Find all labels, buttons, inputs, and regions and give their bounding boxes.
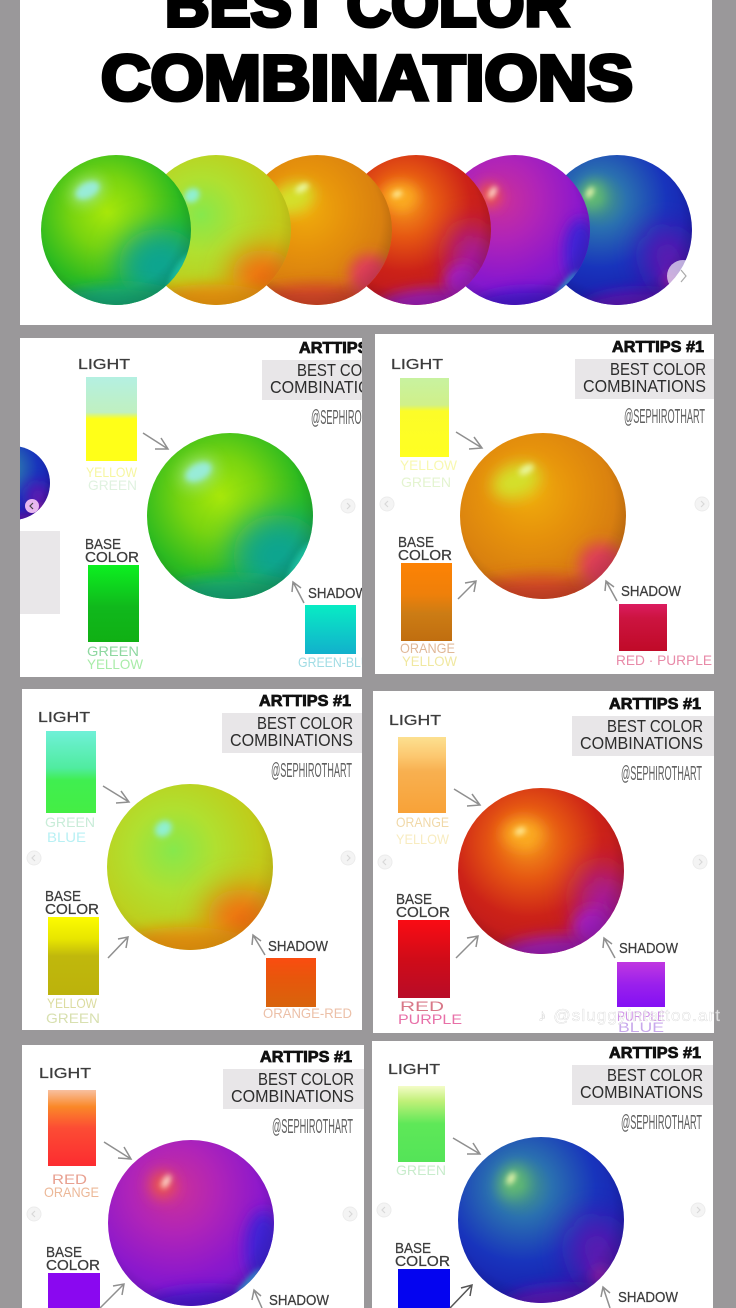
shadow label and swatch, clipped at panel edge: GREEN-BLUE — [298, 654, 378, 670]
base color names: YELLOW — [47, 995, 98, 1011]
header block: BEST COLOR — [607, 716, 703, 736]
sphere: blue — [458, 1137, 635, 1308]
sphere: purple — [108, 1140, 282, 1308]
arrow: light to sphere — [143, 433, 168, 449]
header block: @SEPHIROTHART — [272, 1116, 353, 1138]
light label: LIGHT — [389, 713, 441, 729]
base color label: BASE — [46, 1245, 82, 1261]
base color names: YELLOW — [402, 653, 458, 669]
arrow: base to sphere — [458, 581, 476, 599]
base swatch — [88, 565, 139, 642]
header block: COMBINATIONS — [580, 733, 703, 753]
light color names: RED — [52, 1171, 87, 1187]
shadow label: SHADOW — [268, 939, 328, 955]
arrow: shadow to sphere — [605, 581, 617, 601]
shadow color names: BLUE — [618, 1019, 664, 1035]
base color names: GREEN — [87, 643, 139, 659]
base swatch — [48, 1273, 100, 1308]
partial blue sphere at left edge — [20, 446, 50, 520]
base color names — [87, 643, 144, 672]
panel: yellow-green sphere tip — [22, 689, 362, 1030]
light color names: YELLOW — [396, 831, 450, 847]
header block — [572, 1045, 713, 1134]
header block — [262, 342, 362, 427]
shadow color names: RED · PURPLE — [616, 652, 712, 668]
light color names: YELLOW — [400, 457, 458, 473]
base color names: GREEN — [46, 1010, 100, 1026]
sphere: yellow-green — [103, 784, 276, 987]
header block: @SEPHIROTHART — [311, 407, 392, 429]
base color label — [46, 1245, 100, 1274]
header block: ARTTIPS #1 — [609, 1045, 701, 1062]
light color names: ORANGE — [44, 1184, 99, 1200]
header block — [575, 339, 714, 428]
light color names: GREEN — [401, 474, 451, 490]
header block: ARTTIPS #1 — [612, 339, 704, 356]
gray partial box — [20, 531, 60, 614]
base color names — [398, 998, 462, 1027]
header block: BEST COLOR — [297, 360, 393, 380]
base color label: COLOR — [396, 905, 450, 921]
icons: carousel chevrons — [380, 497, 709, 511]
shadow label and swatch, clipped at panel edge: SHADOW — [308, 586, 368, 602]
light swatch — [86, 377, 137, 461]
header block: COMBINATIONS — [270, 377, 393, 397]
light swatch — [48, 1090, 96, 1166]
base color names — [46, 995, 100, 1026]
light swatch — [400, 378, 449, 457]
sphere: red — [458, 788, 638, 986]
panel: red sphere tip — [373, 691, 720, 1035]
light color names: BLUE — [47, 829, 86, 845]
header block: ARTTIPS #1 — [609, 696, 701, 713]
base color label — [45, 889, 99, 918]
icons: carousel chevrons — [27, 1207, 357, 1221]
shadow label and swatch, clipped at panel edge — [262, 342, 362, 667]
arrow: shadow to sphere — [601, 1287, 610, 1308]
header block: COMBINATIONS — [231, 1086, 354, 1106]
sphere: orange — [452, 433, 637, 636]
sphere row — [41, 155, 702, 338]
shadow swatch — [617, 962, 665, 1007]
base color names — [400, 640, 458, 669]
header block: ARTTIPS #1 — [259, 693, 351, 710]
arrow: shadow to sphere — [292, 582, 304, 603]
arrow: base to sphere — [108, 937, 128, 958]
panel: blue sphere tip — [372, 1041, 713, 1308]
base color names: ORANGE — [400, 640, 455, 656]
panel: green sphere tip — [20, 338, 362, 677]
shadow swatch — [619, 604, 667, 651]
arrow: shadow to sphere — [252, 1290, 262, 1308]
arrow: shadow to sphere — [603, 938, 615, 958]
arrow: light to sphere — [456, 432, 482, 449]
header block: BEST COLOR — [607, 1065, 703, 1085]
header block: COMBINATIONS — [230, 730, 353, 750]
arrow: light to sphere — [103, 786, 129, 803]
title — [101, 0, 633, 114]
header block: COMBINATIONS — [583, 376, 706, 396]
light label: LIGHT — [39, 1066, 91, 1082]
light label: LIGHT — [388, 1062, 440, 1078]
base color label: COLOR — [45, 902, 99, 918]
icon: next chevron button — [667, 260, 699, 292]
base color label: COLOR — [395, 1254, 450, 1270]
shadow label: SHADOW — [621, 584, 681, 600]
header block: @SEPHIROTHART — [271, 760, 352, 782]
base swatch — [48, 917, 99, 995]
light color names — [86, 464, 138, 493]
base swatch — [398, 1269, 450, 1308]
title: COMBINATIONS — [101, 42, 633, 114]
shadow label: SHADOW — [618, 1290, 678, 1306]
base color label: BASE — [395, 1241, 431, 1257]
light label: LIGHT — [38, 710, 90, 726]
base color label: COLOR — [85, 550, 139, 566]
arrow: base to sphere — [456, 936, 478, 958]
watermark: ♪ @sluggyintattoo.art — [538, 1006, 720, 1025]
header block — [222, 693, 362, 782]
base color label: BASE — [45, 889, 81, 905]
shadow label: SHADOW — [619, 941, 678, 957]
arrow: shadow to sphere — [252, 935, 265, 955]
light label: LIGHT — [391, 357, 443, 373]
light color names — [400, 457, 458, 490]
arrow: light to sphere — [453, 1138, 480, 1154]
icon: next chevron — [341, 499, 355, 513]
header block: COMBINATIONS — [580, 1082, 703, 1102]
icons: carousel chevrons — [377, 1203, 705, 1217]
light color name: GREEN — [396, 1162, 446, 1178]
sphere: green — [147, 433, 324, 630]
light label: LIGHT — [78, 357, 130, 373]
light color names: GREEN — [45, 814, 95, 830]
light swatch — [398, 1086, 445, 1162]
light swatch — [46, 731, 96, 813]
arrow: base to sphere — [450, 1285, 472, 1308]
panel: title and sphere row — [20, 0, 712, 338]
icons: carousel chevrons — [27, 851, 355, 865]
shadow color names: PURPLE — [617, 1008, 665, 1024]
light swatch — [398, 737, 446, 813]
shadow color names — [617, 1008, 665, 1035]
header block: ARTTIPS #1 — [299, 340, 391, 357]
header block: ARTTIPS #1 — [260, 1049, 352, 1066]
icons: carousel chevrons — [378, 855, 707, 869]
header block: BEST COLOR — [610, 359, 706, 379]
base color label: BASE — [398, 535, 434, 551]
light color names — [45, 814, 95, 845]
light color names — [396, 814, 450, 847]
header block: BEST COLOR — [257, 713, 353, 733]
header block — [572, 696, 714, 785]
light color names: ORANGE — [396, 814, 449, 830]
base color names: YELLOW — [87, 656, 144, 672]
base color names: PURPLE — [398, 1011, 462, 1027]
arrow: base to sphere — [100, 1284, 124, 1308]
light color names: GREEN — [88, 477, 137, 493]
base swatch — [401, 563, 452, 641]
base color label: BASE — [396, 892, 432, 908]
base color label: COLOR — [398, 548, 452, 564]
arrow: light to sphere — [454, 789, 480, 806]
panel: purple sphere tip — [22, 1045, 364, 1308]
header block: BEST COLOR — [258, 1069, 354, 1089]
base color label: BASE — [85, 537, 121, 553]
panel: orange sphere tip — [375, 334, 714, 674]
base color label — [85, 537, 139, 566]
base color label — [395, 1241, 450, 1270]
arrow: light to sphere — [104, 1142, 131, 1159]
light color names — [44, 1171, 99, 1200]
base color label: COLOR — [46, 1258, 100, 1274]
base color names: RED — [400, 998, 444, 1014]
light color names: YELLOW — [86, 464, 138, 480]
shadow swatch — [266, 958, 316, 1007]
base swatch — [398, 920, 450, 998]
base color label — [398, 535, 452, 564]
header block — [223, 1049, 364, 1138]
base color label — [396, 892, 450, 921]
shadow color names: ORANGE-RED — [263, 1005, 352, 1021]
